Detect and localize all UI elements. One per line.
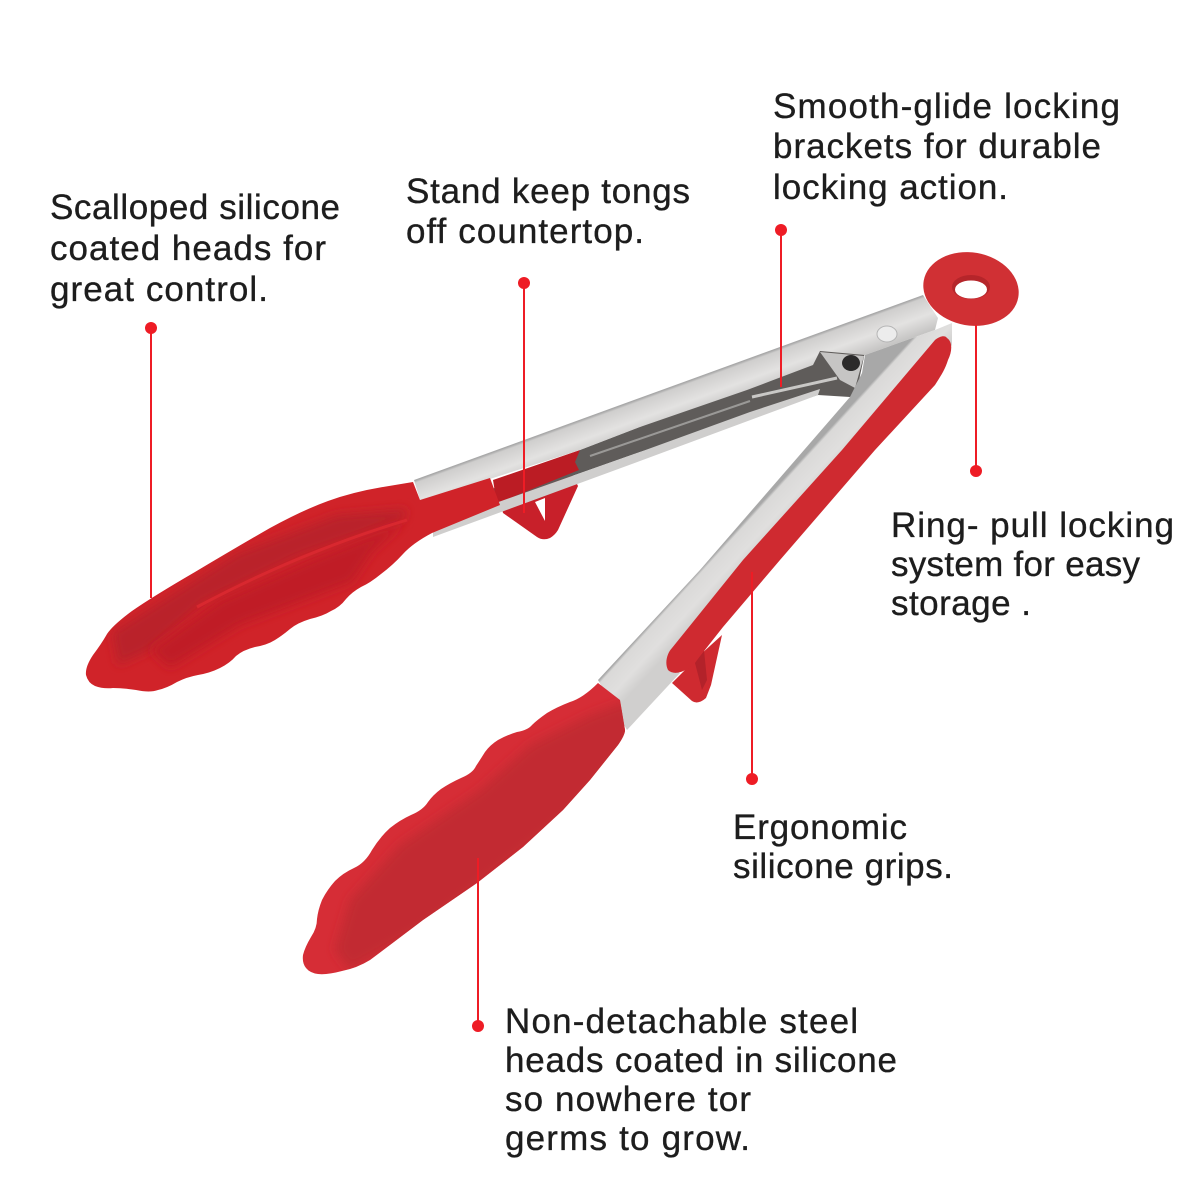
lower stand bbox=[672, 635, 722, 702]
leader: scalloped heads bbox=[145, 322, 157, 598]
upper silicone head bbox=[86, 478, 500, 692]
text: stand bbox=[406, 172, 690, 251]
text: scalloped heads: Scalloped silicone bbox=[50, 188, 340, 227]
text: steel heads: Non-detachable steel bbox=[505, 1002, 858, 1041]
text: steel heads: germs to grow. bbox=[505, 1119, 750, 1158]
text: ring pull: system for easy bbox=[891, 545, 1140, 584]
leader: grips bbox=[746, 572, 758, 785]
leader: stand bbox=[518, 277, 530, 513]
head lower shadow bbox=[156, 532, 388, 665]
text: steel heads: so nowhere tor bbox=[505, 1080, 751, 1119]
text: grips: Ergonomic bbox=[733, 808, 907, 847]
spring wire bbox=[752, 378, 837, 397]
bracket pivot hole bbox=[842, 355, 860, 371]
leader: steel heads bbox=[472, 858, 484, 1032]
text: scalloped heads: great control. bbox=[50, 270, 268, 309]
upper arm channel bbox=[490, 350, 865, 505]
text: locking brackets: brackets for durable bbox=[773, 127, 1101, 166]
upper stand bbox=[500, 470, 578, 539]
ring pull bbox=[917, 245, 1025, 333]
head crease bbox=[197, 520, 407, 607]
text: steel heads: heads coated in silicone bbox=[505, 1041, 897, 1080]
text: ring pull: Ring- pull locking bbox=[891, 506, 1174, 545]
lower head shading bbox=[335, 700, 632, 970]
text: stand: Stand keep tongs bbox=[406, 172, 690, 211]
text: locking brackets: locking action. bbox=[773, 168, 1008, 207]
upper arm top face bbox=[414, 295, 938, 500]
lower rail bbox=[433, 389, 820, 537]
text: ring pull: storage . bbox=[891, 584, 1031, 623]
text: locking brackets: Smooth-glide locking bbox=[773, 87, 1120, 126]
illustration: kitchen tongs bbox=[86, 245, 1025, 974]
leader: locking brackets bbox=[775, 224, 787, 387]
text: grips: silicone grips. bbox=[733, 847, 953, 886]
text: locking brackets bbox=[773, 87, 1120, 207]
channel highlight bbox=[590, 401, 750, 456]
text: stand: off countertop. bbox=[406, 212, 644, 251]
plate rivet bbox=[877, 326, 897, 342]
inner red insert bbox=[493, 450, 580, 505]
text: scalloped heads: coated heads for bbox=[50, 229, 326, 268]
bracket plate bbox=[820, 352, 864, 388]
text: scalloped heads bbox=[50, 188, 340, 309]
ergonomic silicone grip bbox=[666, 336, 951, 673]
head shaded hollow bbox=[112, 509, 407, 665]
lower arm steel bbox=[598, 323, 952, 730]
text: grips bbox=[733, 808, 953, 886]
text: ring pull bbox=[891, 506, 1174, 623]
text: steel heads bbox=[505, 1002, 897, 1158]
lower silicone head bbox=[303, 683, 632, 974]
leader: ring pull bbox=[970, 325, 982, 477]
